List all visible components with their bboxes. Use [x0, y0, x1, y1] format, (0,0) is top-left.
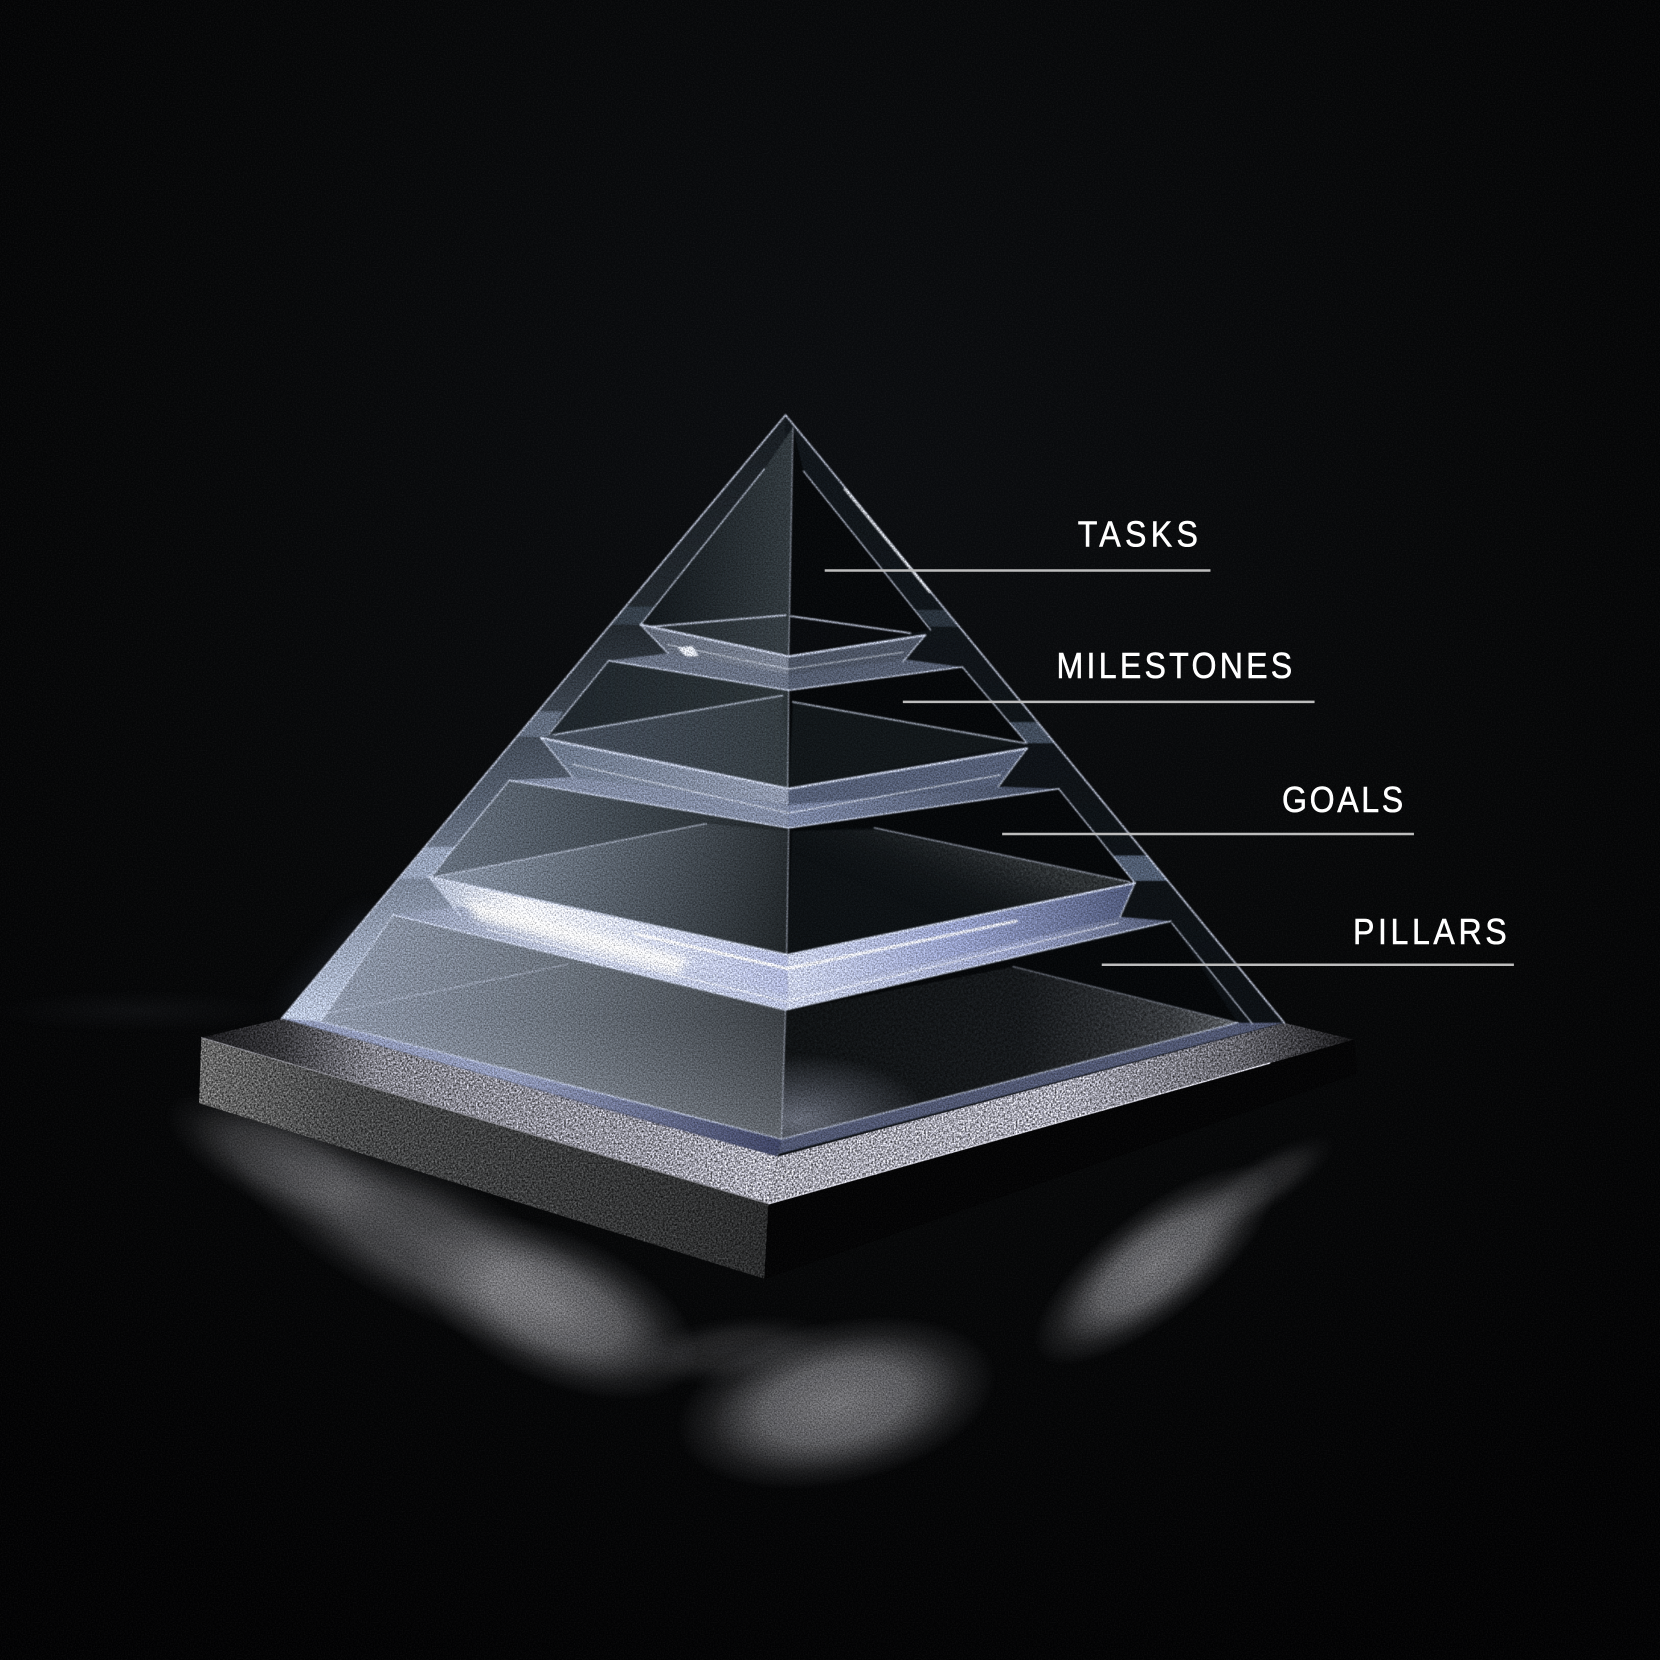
plinth left side	[199, 1038, 769, 1279]
label: tasks: TASKS	[1078, 514, 1198, 555]
glass edge highlights	[282, 415, 1284, 1139]
plinth	[199, 1018, 1357, 1279]
photographic scene with reflections, plinth and pyramid	[0, 415, 1357, 1518]
plinth top right band	[769, 1023, 1354, 1204]
plinth right side	[764, 1040, 1357, 1279]
right reflection streak	[1003, 1115, 1351, 1400]
left reflection streak	[144, 1060, 727, 1440]
centre reflection blob	[621, 1288, 1014, 1518]
ambient left halo	[0, 988, 296, 1034]
tier: tasks	[609, 429, 962, 690]
pyramid silhouette left	[282, 415, 786, 1156]
label: goals: GOALS	[1282, 780, 1403, 820]
glow beside lit edge	[277, 910, 397, 1022]
label: pillars: PILLARS	[1353, 912, 1507, 952]
tier: goals	[393, 780, 1171, 1010]
tier: milestones	[509, 661, 1059, 828]
glass pyramid	[282, 415, 1284, 1186]
tier: pillars	[284, 916, 1284, 1157]
plinth top left band	[201, 1018, 778, 1204]
label: milestones: MILESTONES	[1057, 646, 1292, 686]
floor reflections	[0, 910, 1351, 1518]
pyramid silhouette right	[778, 415, 1284, 1156]
